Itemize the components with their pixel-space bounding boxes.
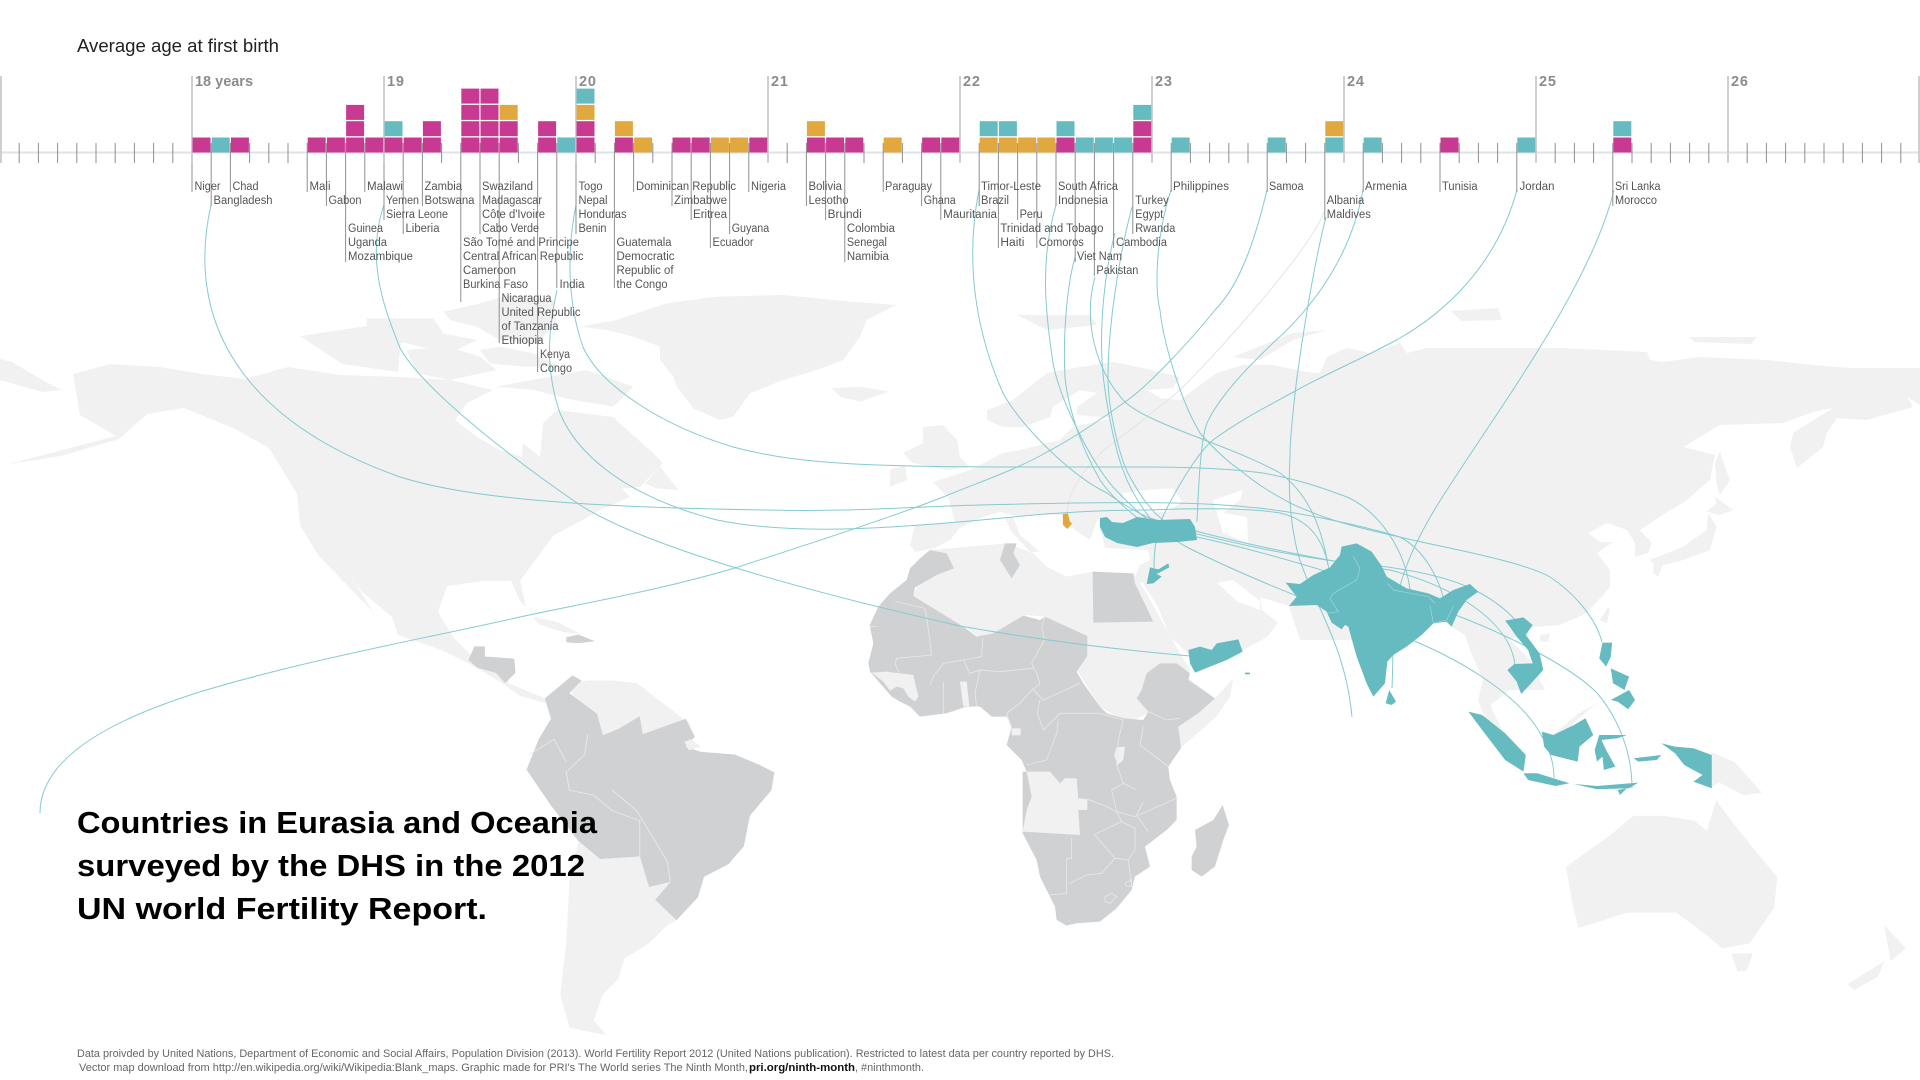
curve: India [550,290,1330,575]
labels: age 22 to 23: Indonesia [1058,195,1109,207]
Morocco [869,550,954,627]
age axis [0,74,1920,163]
curve: Pakistan [1090,277,1328,565]
labels: age 19 to 20: Liberia [406,223,440,235]
map: Africa [868,543,1233,926]
labels: age 19 to 20: United Republic [502,307,581,319]
labels: age 21 to 22: Mauritania [943,209,997,221]
Venezuela and Guianas [572,681,695,735]
South Asia, Yemen, Jordan, Sri Lanka [1147,543,1478,705]
Turkey [1100,517,1197,547]
labels: age 18 to 19 [194,181,413,263]
curve: Nepal [570,205,1410,590]
labels: age 19 to 20: of Tanzania [502,321,559,333]
country labels with leader lines [192,163,1661,375]
chart title: Average age at first birth [77,35,279,56]
labels: age 20 to 21: Guatemala [616,237,672,249]
labels: age 18 to 19: Malawi [367,181,403,193]
major ticks [1,76,1919,163]
labels: age 19 to 20 [386,181,585,375]
main heading [77,805,598,926]
South America surveyed [526,675,774,920]
world map base [0,295,1920,1035]
labels: age 23 and above: Armenia [1365,181,1408,193]
labels: age 22 to 23: Brazil [981,195,1009,207]
labels: age 19 to 20: Côte d'Ivoire [482,209,545,221]
Haiti [566,635,595,643]
labels: age 20 to 21: Guyana [732,223,770,235]
labels: age 20 to 21: Benin [578,223,606,235]
labels: age 18 to 19: Niger [194,181,221,193]
labels: age 22 to 23: Trinidad and Tobago [1000,223,1103,235]
South America borders [530,734,670,882]
labels: age 19 to 20: Central African Republic [463,251,584,263]
sub-Saharan surveyed countries [868,596,1215,926]
labels: age 21 to 22: Paraguay [885,181,932,193]
source note: pri.org/ninth-month [749,1062,855,1074]
Yemen [1188,639,1243,673]
labels: age 23 and above: Jordan [1520,181,1554,193]
labels: age 19 to 20: Zambia [424,181,463,193]
Egypt [1093,572,1153,623]
labels: age 22 to 23: Turkey [1135,195,1169,207]
labels: age 18 to 19: Mali [310,181,330,193]
labels: age 22 to 23: Viet Nam [1077,251,1122,263]
Caspian Sea [1213,490,1248,543]
axis baseline [0,152,1920,154]
labels: age 19 to 20: Congo [540,363,572,375]
labels: age 19 to 20: Ethiopia [502,335,544,347]
labels: age 21 to 22: Bolivia [808,181,843,193]
Novaya Zemlya [1233,330,1327,360]
labels: age 20 to 21: Ecuador [712,237,754,249]
curve: Albania [1067,212,1324,514]
labels: age 21 to 22: Senegal [847,237,887,249]
labels: age 22 to 23 [981,181,1176,277]
curve: Bangladesh [205,205,1445,605]
labels: age 18 to 19: Chad [232,181,258,193]
labels: age 23 and above: Philippines [1173,181,1229,193]
year labels: 26 [1731,74,1748,90]
African borders [895,602,1180,903]
labels: age 20 to 21: Honduras [578,209,627,221]
Japan, Sakhalin, Taiwan, Hainan [1540,452,1733,642]
labels: age 18 to 19: Guinea [348,223,384,235]
Indonesia and Timor-Leste [1468,712,1712,795]
labels: age 23 and above [1173,181,1661,221]
labels: age 19 to 20: Yemen [386,195,419,207]
Madagascar [1192,805,1229,877]
minor ticks [19,143,1901,163]
New Zealand [1848,925,1906,990]
labels: age 18 to 19: Gabon [328,195,362,207]
labels: age 23 and above: Albania [1327,195,1365,207]
labels: age 20 to 21: Zimbabwe [674,195,727,207]
stacked squares: one per country [192,89,1631,152]
Greenland [580,295,897,420]
curve: Maldives [1289,217,1352,717]
Socotra [1245,673,1250,674]
curve: Philippines [1157,190,1602,642]
highlighted countries [1063,513,1712,795]
source note: , #ninthmonth. [855,1062,924,1074]
Siberian islands [1450,308,1757,344]
labels: age 19 to 20: São Tomé and Principe [463,237,579,249]
labels: age 21 to 22: Namibia [847,251,889,263]
Ghana stripe [960,682,969,707]
Ireland [890,465,907,487]
labels: age 22 to 23: Pakistan [1096,265,1138,277]
Eurasia [910,343,1920,765]
year labels: 21 [771,74,788,90]
labels: age 20 to 21: Nigeria [751,181,787,193]
source note [77,1048,1114,1074]
labels: age 19 to 20: Cameroon [463,265,516,277]
year labels: 20 [579,74,596,90]
year labels: 18 years [195,74,253,90]
North America [9,364,663,703]
north Africa and unsurveyed countries [913,543,1233,748]
Australia [1566,800,1777,948]
Tunisia [1000,543,1020,578]
Tasmania [1731,953,1753,971]
Svalbard [1017,315,1097,330]
curve: Timor-Leste [973,190,1632,788]
labels: age 22 to 23: Comoros [1039,237,1084,249]
year labels: 22 [963,74,980,90]
Guinea area [872,672,918,702]
labels: age 22 to 23: Peru [1020,209,1043,221]
labels: age 20 to 21 [578,181,787,291]
curve: Turkey [1108,207,1163,520]
curve: Sri Lanka [1392,190,1614,688]
leader lines [192,163,1613,372]
labels: age 21 to 22: Colombia [847,223,895,235]
curve: Cambodia [1102,233,1515,665]
French Guiana [684,739,701,750]
curve: Indonesia [1045,205,1554,778]
labels: age 18 to 19: Mozambique [348,251,413,263]
source note: Vector map download from http://en.wikipedia.org/wiki/Wikipedia:Blank_maps. Graphic made for PRI's The World series The Ninth Month, [79,1062,748,1074]
labels: age 20 to 21: Nepal [578,195,608,207]
map: Oceania [1554,703,1906,990]
year labels: 24 [1347,74,1364,90]
year labels: 19 [387,74,404,90]
labels: age 20 to 21: Eritrea [693,209,728,221]
labels: age 19 to 20: India [560,279,585,291]
labels: age 19 to 20: Sierra Leone [386,209,448,221]
Chukotka at left edge [0,359,61,392]
Borneo north [1554,703,1597,734]
Southern cone [560,841,676,1035]
curve: Samoa [40,190,1267,813]
Jordan [1147,563,1169,584]
labels: age 23 and above: Tunisia [1442,181,1478,193]
labels: age 19 to 20: Nicaragua [502,293,552,305]
source note: Data proivded by United Nations, Department of Economic and Social Affairs, Population Division (2013). World Fertility Report 2012 (United Nations publication). Restricted to latest data per country reported by DHS. [77,1048,1114,1060]
labels: age 22 to 23: Egypt [1135,209,1164,221]
labels: age 21 to 22: Brundi [828,209,862,221]
Viet Nam and Cambodia [1505,617,1543,694]
South Asia borders [1327,557,1453,623]
curve: Armenia [1197,190,1363,522]
labels: age 22 to 23: Rwanda [1135,223,1176,235]
main heading: surveyed by the DHS in the 2012 [77,848,585,883]
year labels [195,74,1748,90]
labels: age 22 to 23: Haiti [1000,237,1024,249]
labels: age 19 to 20: Botswana [424,195,475,207]
Black Sea [1123,488,1182,513]
Britain [903,425,970,470]
labels: age 21 to 22: Lesotho [808,195,848,207]
Southeast Asia [1063,513,1712,795]
curve: Yemen [376,205,1190,656]
Italy [1005,517,1040,552]
labels: age 20 to 21: Togo [578,181,602,193]
labels: age 23 and above: Maldives [1327,209,1371,221]
main heading: Countries in Eurasia and Oceania [77,805,598,840]
Rwanda patch [1114,747,1125,765]
Arctic Canada and Greenland [367,295,897,490]
Cuba [533,617,582,635]
map: Americas details [300,326,774,1035]
labels: age 23 and above: Sri Lanka [1615,181,1661,193]
year labels: 23 [1155,74,1172,90]
labels: age 19 to 20: Swaziland [482,181,533,193]
labels: age 19 to 20: Madagascar [482,195,542,207]
labels: age 21 to 22 [808,181,997,263]
labels: age 18 to 19: Bangladesh [214,195,272,207]
labels: age 20 to 21: Dominican Republic [636,181,736,193]
labels: age 20 to 21: Democratic [616,251,675,263]
labels: age 19 to 20: Burkina Faso [463,279,528,291]
Gabon patch [1012,728,1021,735]
Philippines [1599,643,1635,709]
year labels: 25 [1539,74,1556,90]
labels: age 20 to 21: Republic of [616,265,674,277]
connector curves from timeline to countries [40,190,1632,813]
Guatemala Honduras Nicaragua [468,646,515,683]
labels: age 20 to 21: the Congo [616,279,668,291]
western Arctic islands [300,326,401,372]
Angola [1023,772,1087,835]
Persian Gulf [1217,580,1260,610]
Papua New Guinea [1711,752,1762,795]
curve: Viet Nam [1064,257,1520,625]
labels: age 19 to 20: Kenya [540,349,571,361]
curve: Jordan [1154,190,1517,568]
India Pakistan Nepal Bangladesh Bhutan [1286,543,1478,697]
labels: age 23 and above: Samoa [1269,181,1304,193]
labels: age 18 to 19: Uganda [348,237,388,249]
Sri Lanka [1386,690,1396,705]
Albania [1063,513,1072,529]
labels: age 23 and above: Morocco [1615,195,1657,207]
Arctic islands [367,295,678,490]
Iceland [832,387,888,402]
main heading: UN world Fertility Report. [77,891,487,926]
labels: age 22 to 23: South Africa [1058,181,1119,193]
labels: age 22 to 23: Timor-Leste [981,181,1041,193]
labels: age 21 to 22: Ghana [924,195,956,207]
labels: age 22 to 23: Cambodia [1116,237,1168,249]
labels: age 19 to 20: Cabo Verde [482,223,539,235]
